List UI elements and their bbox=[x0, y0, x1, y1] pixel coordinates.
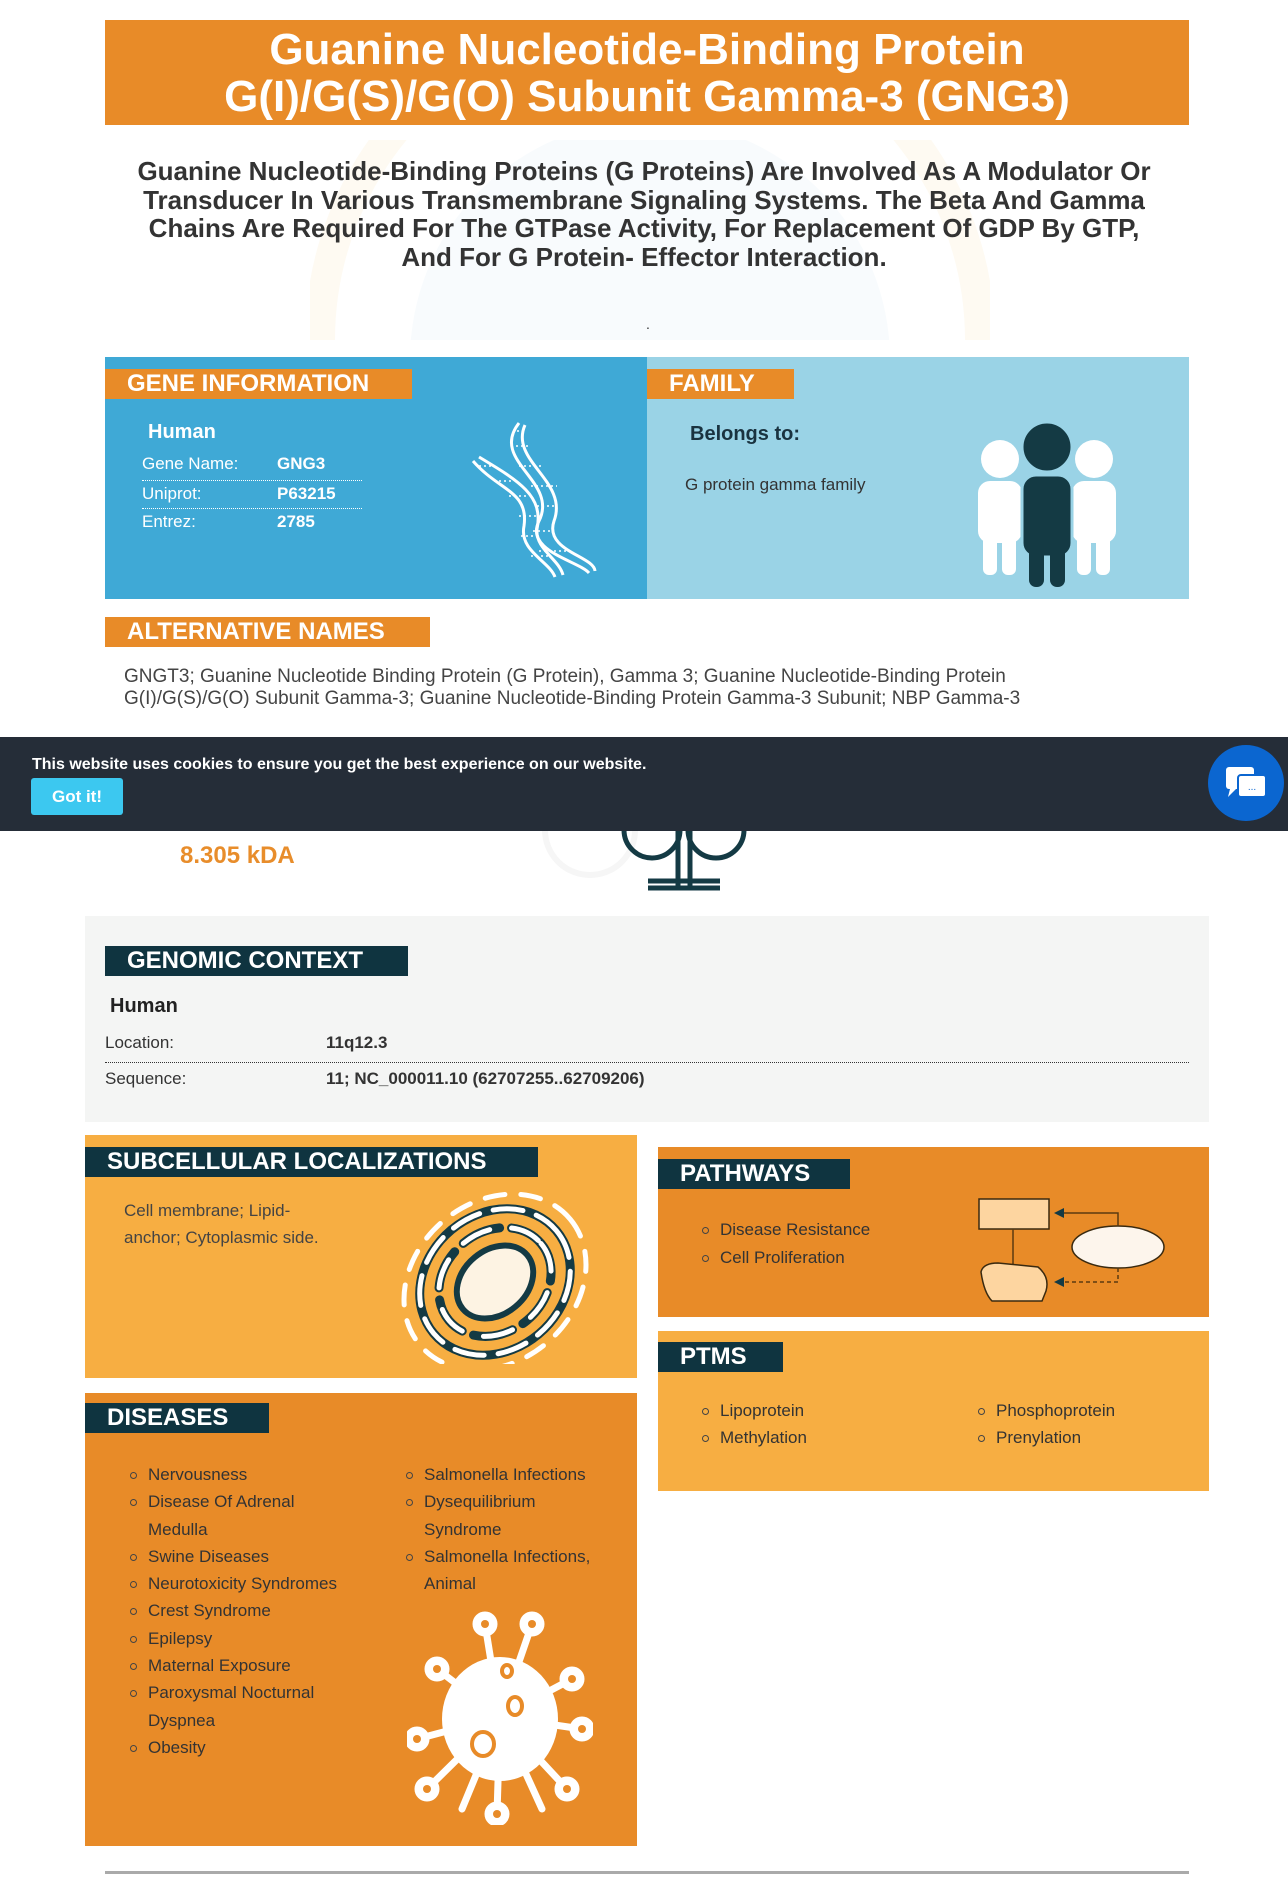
tag: pathways bbox=[658, 1159, 850, 1189]
title: G(I)/G(S)/G(O) Subunit Gamma-3 (GNG3) bbox=[224, 72, 1070, 121]
gene info text: 2785 bbox=[277, 512, 315, 531]
diseases list col 1: Crest Syndrome bbox=[148, 1601, 271, 1620]
icon: people bbox=[978, 424, 1116, 587]
ptms list col 1: Lipoprotein bbox=[720, 1401, 804, 1420]
tag: alternative names: ALTERNATIVE NAMES bbox=[127, 618, 385, 645]
title: Guanine Nucleotide-Binding Protein bbox=[269, 25, 1025, 74]
ptms list col 2 bbox=[978, 1401, 1115, 1447]
button: got it bbox=[31, 778, 123, 815]
bottom rule bbox=[105, 1871, 1189, 1874]
icon: dna bbox=[472, 422, 596, 578]
gene info text: P63215 bbox=[277, 484, 336, 503]
diseases list col 1: Nervousness bbox=[148, 1465, 247, 1484]
tag: ptms: PTMS bbox=[680, 1343, 747, 1370]
icon: pathway diagram bbox=[978, 1198, 1165, 1302]
diseases list col 1: Maternal Exposure bbox=[148, 1656, 291, 1675]
alternative names text bbox=[124, 666, 1020, 709]
icon: chat bbox=[1208, 745, 1284, 821]
alternative names text: G(I)/G(S)/G(O) Subunit Gamma-3; Guanine Nucleotide-Binding Protein Gamma-3 Subunit; NBP Gamma-3 bbox=[124, 688, 1020, 709]
genomic rows: 11q12.3 bbox=[326, 1033, 387, 1052]
genomic rows: Sequence: bbox=[105, 1069, 186, 1088]
panel: diseases bbox=[85, 1393, 637, 1846]
icon: virus bbox=[407, 1612, 593, 1825]
diseases list col 2 bbox=[406, 1465, 590, 1593]
panel: ptms bbox=[658, 1331, 1209, 1491]
diseases list col 1: Obesity bbox=[148, 1738, 206, 1757]
gene info text: Gene Name: bbox=[142, 454, 238, 473]
icon: scale bbox=[542, 831, 746, 890]
tag: subcellular: SUBCELLULAR LOCALIZATIONS bbox=[107, 1148, 487, 1175]
cookie bar bbox=[0, 737, 1288, 831]
diseases list col 2: Salmonella Infections, Animal bbox=[424, 1547, 590, 1593]
text: . bbox=[646, 316, 650, 332]
genomic rows: Location: bbox=[105, 1033, 174, 1052]
tag: diseases: DISEASES bbox=[107, 1404, 228, 1431]
gene info text: Uniprot: bbox=[142, 484, 202, 503]
tag: family bbox=[647, 369, 794, 399]
pathways list: Cell Proliferation bbox=[720, 1248, 845, 1267]
diseases list col 2: Dysequilibrium Syndrome bbox=[424, 1492, 535, 1539]
gene info text bbox=[142, 421, 362, 531]
genomic rows: 11; NC_000011.10 (62707255..62709206) bbox=[326, 1069, 645, 1088]
family text: G protein gamma family bbox=[685, 475, 865, 494]
icon: chat: ... bbox=[1248, 782, 1256, 793]
panel: subcellular localizations bbox=[85, 1135, 637, 1378]
ptms list col 1 bbox=[702, 1401, 807, 1447]
molecular weight: 8.305 kDA bbox=[180, 842, 295, 869]
human: Human bbox=[110, 995, 178, 1017]
pathways list bbox=[702, 1220, 870, 1267]
tag: genomic context: GENOMIC CONTEXT bbox=[127, 947, 363, 974]
diseases list col 1: Swine Diseases bbox=[148, 1547, 269, 1566]
watermark bbox=[310, 140, 990, 340]
button: got it: Got it! bbox=[52, 787, 102, 806]
tag: gene information: GENE INFORMATION bbox=[127, 370, 369, 397]
icon: cell bbox=[402, 1192, 588, 1364]
belongs to: Belongs to: bbox=[690, 423, 800, 445]
gene info text: Entrez: bbox=[142, 512, 196, 531]
panel: genomic context bbox=[85, 916, 1209, 1122]
cookie text: This website uses cookies to ensure you get the best experience on our website. bbox=[32, 756, 646, 773]
panel: family bbox=[647, 357, 1189, 599]
gene info text: Human bbox=[148, 421, 216, 443]
panel: pathways bbox=[658, 1147, 1209, 1317]
tag: family: FAMILY bbox=[669, 370, 755, 397]
genomic rows bbox=[105, 1033, 1189, 1088]
diseases list col 1: Paroxysmal Nocturnal Dyspnea bbox=[148, 1683, 314, 1730]
subtitle: Guanine Nucleotide-Binding Proteins (G Proteins) Are Involved As A Modulator Or Transducer In Various Transmembrane Signaling Systems. The Beta And Gamma Chains Are Required For The GTPase Activity, For Replacement Of GDP By GTP, And For G Protein- Effector Interaction. bbox=[137, 156, 1151, 272]
alternative names text: GNGT3; Guanine Nucleotide Binding Protein (G Protein), Gamma 3; Guanine Nucleotide-Binding Protein bbox=[124, 666, 1006, 687]
ptms list col 2: Phosphoprotein bbox=[996, 1401, 1115, 1420]
diseases list col 1: Epilepsy bbox=[148, 1629, 212, 1648]
tag: ptms bbox=[658, 1342, 783, 1372]
diseases list col 1 bbox=[130, 1465, 337, 1757]
tag: pathways: PATHWAYS bbox=[680, 1160, 810, 1187]
subcellular text: Cell membrane; Lipid-anchor; Cytoplasmic side. bbox=[124, 1201, 319, 1247]
ptms list col 2: Prenylation bbox=[996, 1428, 1081, 1447]
diseases list col 2: Salmonella Infections bbox=[424, 1465, 586, 1484]
diseases list col 1: Disease Of Adrenal Medulla bbox=[148, 1492, 294, 1539]
panel: gene information bbox=[105, 357, 647, 599]
ptms list col 1: Methylation bbox=[720, 1428, 807, 1447]
gene info text: GNG3 bbox=[277, 454, 325, 473]
title bbox=[105, 20, 1189, 125]
tag: diseases bbox=[85, 1403, 269, 1433]
diseases list col 1: Neurotoxicity Syndromes bbox=[148, 1574, 337, 1593]
pathways list: Disease Resistance bbox=[720, 1220, 870, 1239]
